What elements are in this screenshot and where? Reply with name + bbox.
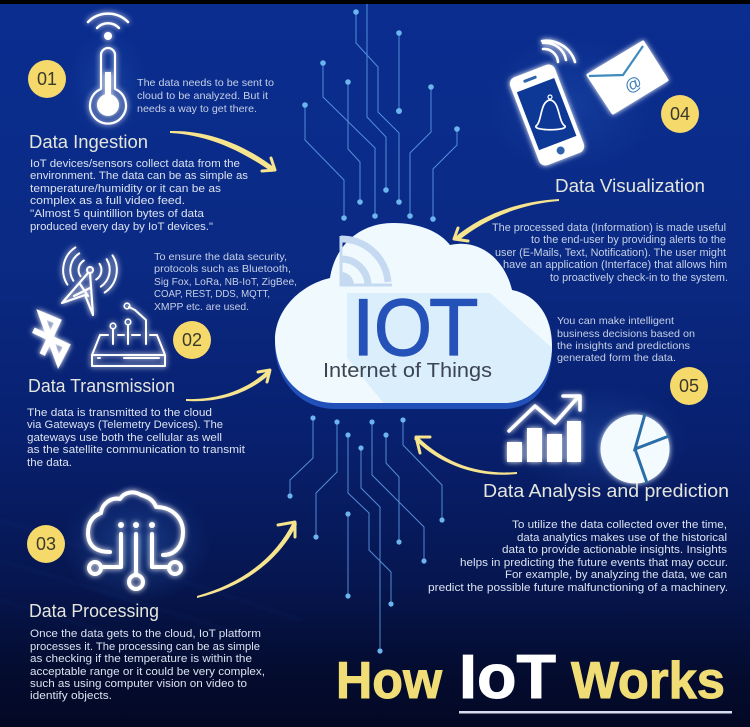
text: data processing body: identify objects. bbox=[30, 690, 112, 702]
text: data visualization body bbox=[492, 222, 728, 284]
note: intelligent decisions: generated form the data. bbox=[557, 352, 676, 364]
cloud subtitle: Internet of Things bbox=[323, 359, 492, 382]
text: data analysis body: predict the possible future malfunctioning of a machinery. bbox=[428, 582, 728, 594]
note: sending data: The data needs to be sent to bbox=[137, 77, 274, 89]
text: data analysis body: To utilize the data collected over the time, bbox=[512, 519, 727, 531]
number badge 05 bbox=[670, 367, 708, 405]
text: data ingestion body: produced every day by IoT devices." bbox=[30, 221, 213, 233]
text: data transmission body bbox=[27, 407, 245, 469]
heading: data transmission: Data Transmission bbox=[28, 375, 175, 396]
arrow: ingestion to cloud bbox=[170, 131, 275, 172]
icon: cloud wifi bbox=[341, 236, 392, 285]
number badge 02: 02 bbox=[182, 330, 202, 350]
panel: 03 data processing bbox=[27, 492, 297, 702]
text: data transmission body: gateways use both the cellular as well bbox=[27, 432, 222, 444]
icon: bluetooth bbox=[29, 310, 71, 366]
text: data processing body bbox=[30, 628, 265, 702]
icon: pie chart bbox=[600, 414, 670, 484]
note: sending data: needs a way to get there. bbox=[137, 103, 257, 115]
number badge 04 bbox=[661, 95, 699, 133]
text: data ingestion body: environment. The data can be as simple as bbox=[30, 170, 249, 182]
text: data analysis body: For example, by analyzing the data, we can bbox=[505, 569, 727, 581]
text: data analysis body bbox=[428, 519, 728, 594]
note: sending data bbox=[137, 77, 274, 115]
text: data ingestion body bbox=[30, 158, 249, 233]
cloud title IOT: I bbox=[352, 283, 375, 373]
text: data analysis body: helps in predicting the future events that may occur. bbox=[460, 557, 728, 569]
heading: data ingestion: Data Ingestion bbox=[29, 131, 148, 152]
circuit lines above the cloud bbox=[302, 4, 460, 222]
text: data processing body: acceptable range or it could be very complex, bbox=[30, 666, 265, 678]
arrow: transmission to cloud bbox=[186, 370, 271, 401]
title: how iot works: Works bbox=[571, 652, 725, 710]
icon: email envelope: @ bbox=[621, 72, 645, 97]
text: data ingestion body: IoT devices/sensors collect data from the bbox=[30, 158, 240, 170]
text: data transmission body: The data is transmitted to the cloud bbox=[27, 407, 212, 419]
note: intelligent decisions: business decisions based on bbox=[557, 328, 695, 340]
text: data visualization body: to the end-user by providing alerts to the bbox=[531, 234, 726, 246]
icon: cloud circuit bbox=[88, 492, 183, 589]
text: data transmission body: as the satellite communication to transmit bbox=[27, 444, 245, 456]
text: data visualization body: to proactively check-in to the system. bbox=[550, 272, 728, 284]
icon: bar chart with trend arrow bbox=[507, 396, 581, 462]
note: protocols bbox=[154, 251, 297, 313]
cloud title IOT bbox=[352, 283, 478, 373]
number badge 01 bbox=[28, 60, 66, 98]
note: protocols: XMPP etc. are used. bbox=[154, 301, 249, 313]
icon: signal tower bbox=[60, 246, 120, 315]
heading: data processing: Data Processing bbox=[29, 600, 159, 621]
text: data analysis body: data analytics makes use of the historical bbox=[517, 532, 727, 544]
number badge 04: 04 bbox=[670, 104, 690, 124]
note: protocols: To ensure the data security, bbox=[154, 251, 287, 263]
text: data transmission body: via Gateways (Telemetry Devices). The bbox=[27, 419, 223, 431]
note: sending data: cloud to be analyzed. But it bbox=[137, 90, 268, 102]
note: protocols: Sig Fox, LoRa, NB-IoT, ZigBee, bbox=[154, 276, 297, 288]
arrow: analysis to cloud bbox=[414, 436, 517, 475]
text: data analysis body: data to provide actionable insights. Insights bbox=[502, 544, 728, 556]
text: data ingestion body: temperature/humidity or it can be as bbox=[30, 183, 222, 195]
arrow: cloud to visualization bbox=[454, 199, 559, 241]
icon: email envelope bbox=[588, 42, 667, 113]
top black bar bbox=[0, 0, 750, 4]
text: data processing body: Once the data gets to the cloud, IoT platform bbox=[30, 628, 261, 640]
number badge 02 bbox=[173, 321, 211, 359]
note: intelligent decisions: the insights and predictions bbox=[557, 340, 690, 352]
heading: data analysis and prediction: Data Analysis and prediction bbox=[483, 480, 729, 501]
text: data visualization body: The processed data (Information) is made useful bbox=[492, 222, 726, 234]
panel: 02 data transmission bbox=[27, 246, 297, 469]
text: data visualization body: have an application (Interface) that allows him bbox=[503, 259, 727, 271]
title: how iot works bbox=[336, 643, 732, 714]
panel: 01 data ingestion bbox=[28, 14, 275, 233]
icon: gateway router bbox=[92, 303, 165, 366]
circuit lines below the cloud bbox=[287, 415, 445, 654]
icon: wifi thermometer bbox=[88, 14, 128, 124]
number badge 05: 05 bbox=[679, 376, 699, 396]
title: how iot works: How bbox=[336, 652, 443, 710]
heading: data visualization: Data Visualization bbox=[555, 175, 705, 196]
text: data visualization body: user (E-Mails, Text, Notification). The user might bbox=[495, 247, 726, 259]
number badge 03 bbox=[27, 525, 65, 563]
panel: 04 data visualization bbox=[454, 41, 728, 284]
central cloud bbox=[275, 223, 560, 409]
cloud title IOT: T bbox=[429, 283, 478, 373]
panel: 05 data analysis and prediction bbox=[414, 315, 729, 594]
arrow: processing to cloud bbox=[197, 522, 297, 598]
note: intelligent decisions: You can make intelligent bbox=[557, 315, 674, 327]
text: data processing body: processes it. The processing can be as simple bbox=[30, 641, 260, 653]
note: protocols: protocols such as Bluetooth, bbox=[154, 263, 291, 275]
note: protocols: COAP, REST, DDS, MQTT, bbox=[154, 288, 270, 300]
icon: phone with bell bbox=[508, 41, 586, 167]
number badge 01: 01 bbox=[37, 69, 57, 89]
text: data processing body: such as using computer vision on video to bbox=[30, 678, 247, 690]
text: data ingestion body: "Almost 5 quintillion bytes of data bbox=[30, 208, 205, 220]
text: data ingestion body: complex as a full video feed. bbox=[30, 195, 185, 207]
note: intelligent decisions bbox=[557, 315, 695, 364]
cloud title IOT: O bbox=[374, 283, 432, 373]
number badge 03: 03 bbox=[36, 534, 56, 554]
text: data processing body: as checking if the temperature is within the bbox=[30, 653, 252, 665]
text: data transmission body: the data. bbox=[27, 457, 72, 469]
title: how iot works: IoT bbox=[459, 643, 556, 712]
